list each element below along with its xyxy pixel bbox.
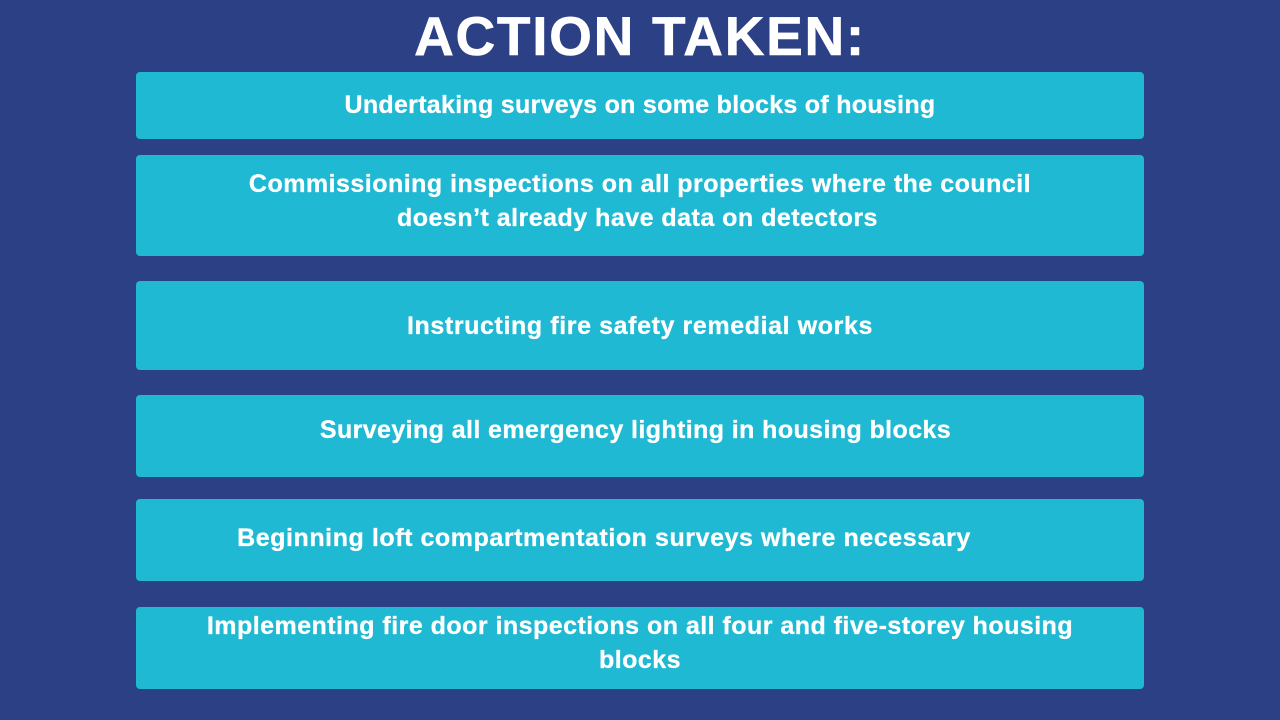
panel: commissioning inspections bbox=[136, 155, 1144, 256]
panel: emergency lighting bbox=[136, 395, 1144, 477]
text: loft compartmentation: Beginning loft compartmentation surveys where necessary bbox=[237, 524, 971, 552]
text: emergency lighting: Surveying all emergency lighting in housing blocks bbox=[320, 416, 951, 444]
text: commissioning inspections: Commissioning inspections on all properties where the council bbox=[249, 170, 1031, 198]
panel: surveys on housing blocks bbox=[136, 72, 1144, 139]
text: fire door inspections: Implementing fire door inspections on all four and five-storey housing bbox=[207, 612, 1073, 640]
text: surveys: Undertaking surveys on some blocks of housing bbox=[345, 91, 935, 119]
panel: fire door inspections bbox=[136, 607, 1144, 689]
text: commissioning inspections: doesn’t already have data on detectors bbox=[397, 204, 878, 232]
text: remedial works: Instructing fire safety remedial works bbox=[407, 312, 873, 340]
text: commissioning inspections bbox=[249, 170, 1031, 232]
panel: remedial works bbox=[136, 281, 1144, 370]
text: fire door inspections: blocks bbox=[599, 646, 681, 674]
text: fire door inspections bbox=[207, 612, 1073, 674]
title: ACTION TAKEN: bbox=[414, 5, 866, 67]
panel: loft compartmentation bbox=[136, 499, 1144, 581]
